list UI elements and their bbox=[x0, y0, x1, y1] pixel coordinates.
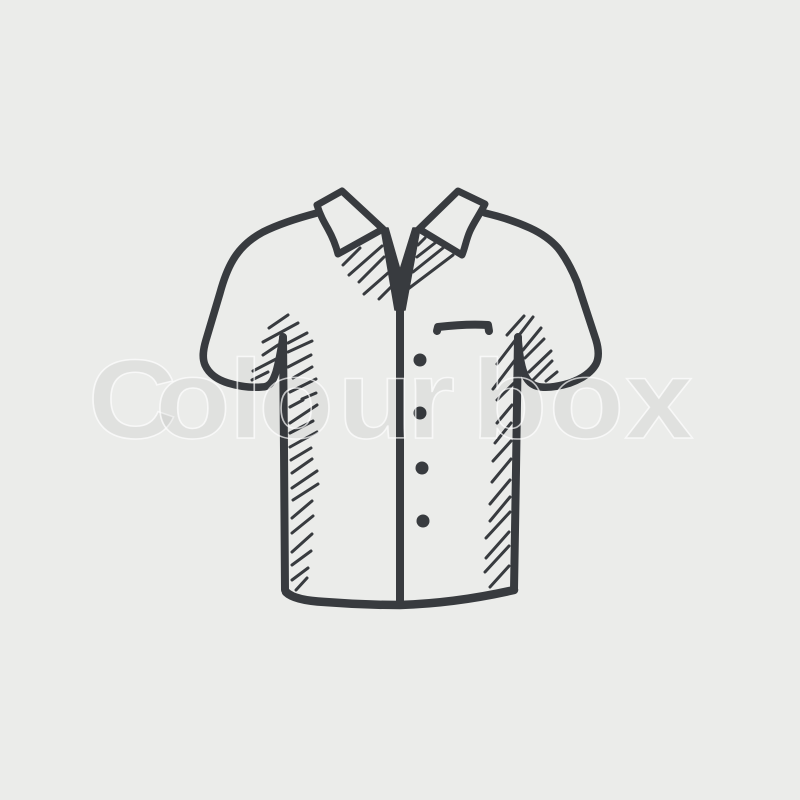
shirt sketch bbox=[203, 191, 598, 605]
placket bbox=[396, 306, 404, 602]
right side seam bbox=[514, 337, 518, 590]
watermark: Colourbox bbox=[88, 336, 693, 462]
left collar bbox=[317, 191, 383, 254]
buttons bbox=[414, 354, 430, 528]
pocket bbox=[437, 325, 489, 331]
hatching: left side bbox=[252, 315, 318, 590]
hatching: right side bbox=[485, 316, 557, 587]
hem bbox=[286, 590, 514, 605]
left sleeve and shoulder bbox=[203, 213, 317, 387]
hatching: collar bbox=[343, 238, 453, 299]
right collar bbox=[419, 191, 485, 255]
left side seam bbox=[283, 337, 285, 590]
neck opening bbox=[381, 228, 420, 310]
right sleeve and shoulder bbox=[485, 213, 598, 387]
